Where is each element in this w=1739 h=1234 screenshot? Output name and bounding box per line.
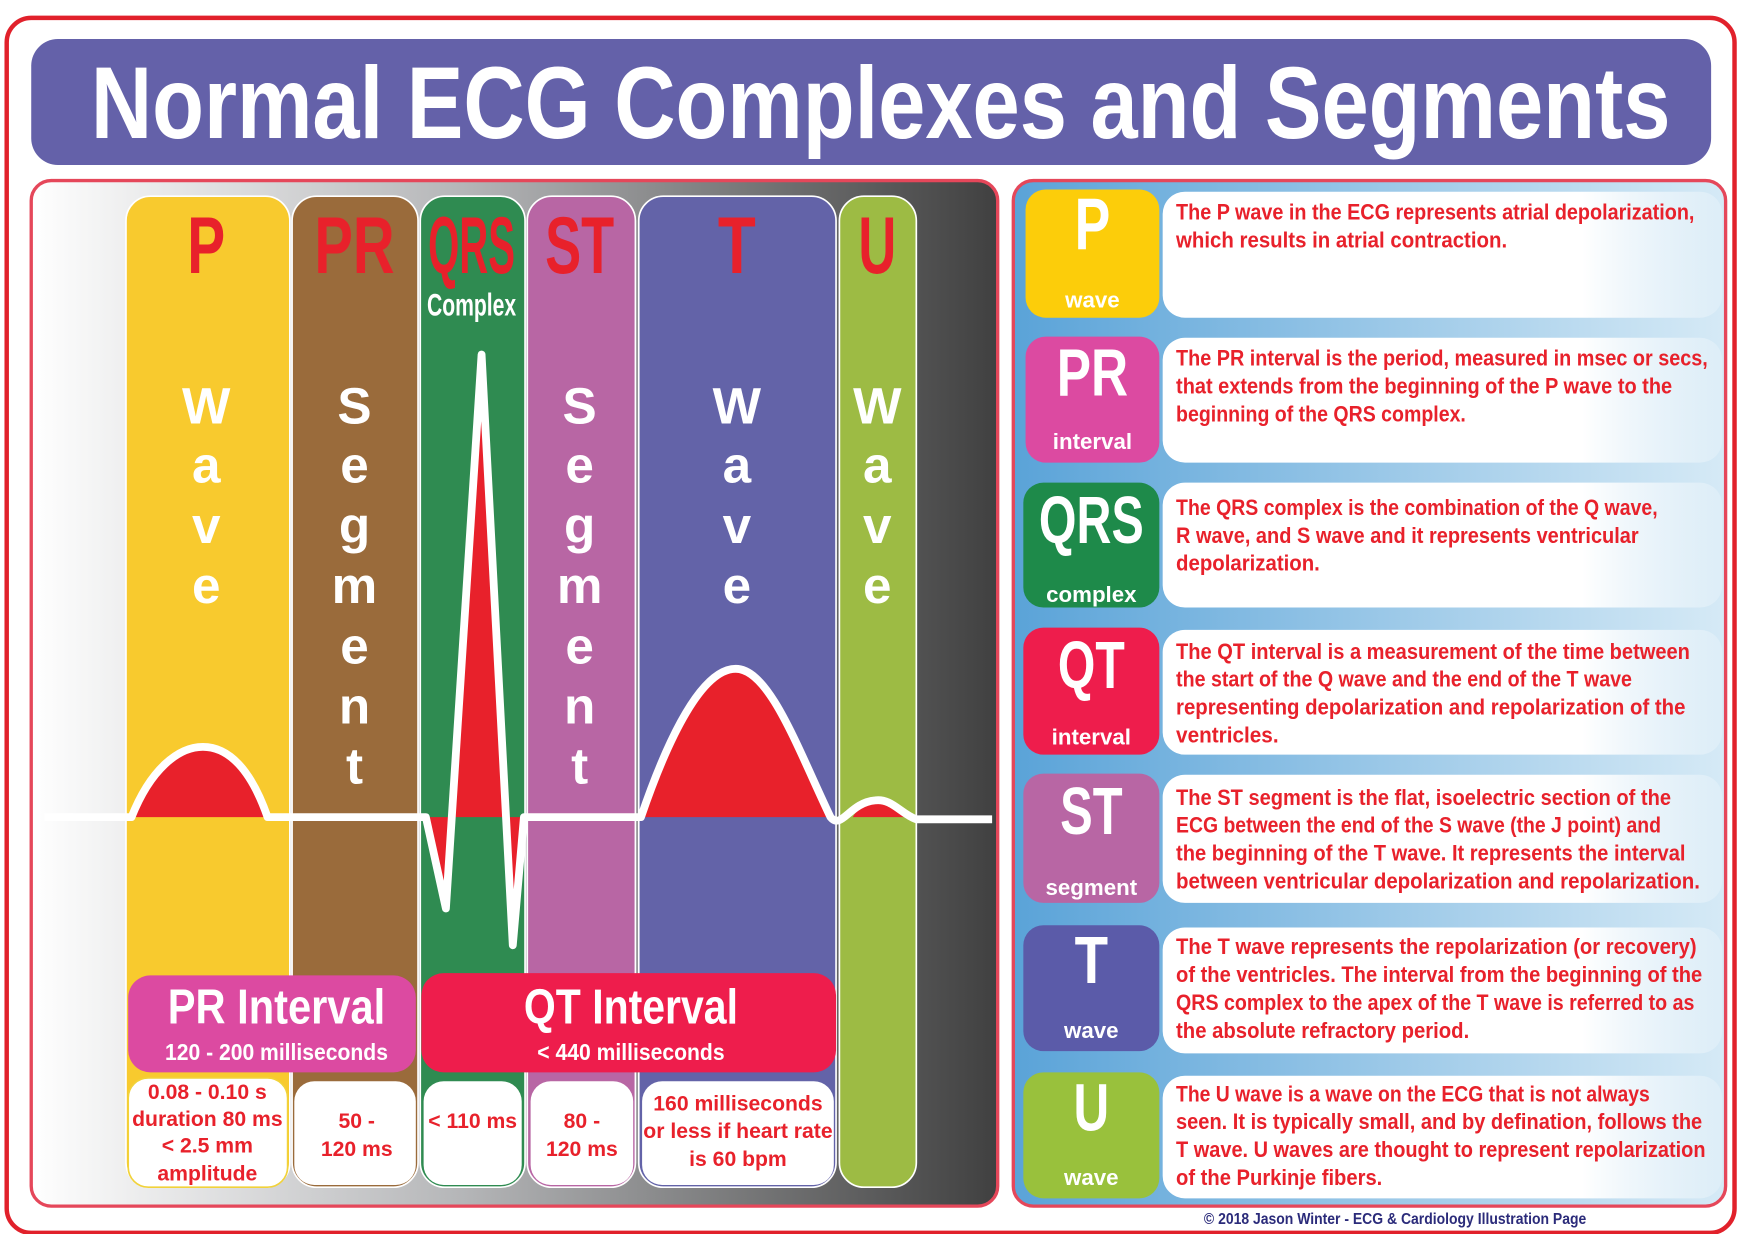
row: ST: ST — [1060, 774, 1123, 849]
column: T wave: W — [713, 378, 762, 435]
row: QT: the start of the Q wave and the end of the T wave — [1176, 667, 1632, 692]
row: U: The U wave is a wave on the ECG that is not always — [1176, 1081, 1650, 1106]
PR interval box: 120 - 200 milliseconds — [165, 1039, 388, 1065]
row: QT: QT — [1058, 628, 1125, 703]
column: PR segment: PR — [314, 201, 395, 291]
column: P wave: P — [187, 201, 225, 291]
row: ST: ECG between the end of the S wave (the J point) and — [1176, 813, 1661, 838]
row: QT: representing depolarization and repolarization of the — [1176, 695, 1685, 720]
row: PR: PR — [1057, 336, 1128, 411]
row: T — [1023, 923, 1722, 1053]
row: QRS: depolarization. — [1176, 551, 1320, 576]
row: U: wave — [1063, 1165, 1119, 1190]
column: ST segment: n — [564, 677, 595, 734]
row: U: of the Purkinje fibers. — [1176, 1165, 1382, 1190]
column: QRS complex: Complex — [427, 287, 517, 322]
copyright: © 2018 Jason Winter - ECG & Cardiology Illustration Page — [1204, 1211, 1587, 1228]
row: T: QRS complex to the apex of the T wave is referred to as — [1176, 990, 1694, 1015]
panel: descriptions — [1013, 181, 1726, 1206]
row: QT: interval — [1052, 725, 1131, 750]
row: ST — [1023, 774, 1722, 903]
column: PR segment: n — [339, 677, 370, 734]
column: T wave: T — [718, 201, 756, 291]
box: QRS duration — [424, 1081, 522, 1185]
column: T wave: a — [723, 437, 752, 494]
box: P duration: amplitude — [157, 1162, 258, 1185]
row: PR: that extends from the beginning of the P wave to the — [1176, 373, 1672, 398]
QT interval box — [421, 973, 836, 1072]
column: U wave: e — [863, 557, 892, 614]
row: QT — [1023, 628, 1722, 755]
panel: ECG diagram — [31, 181, 998, 1206]
row: ST: segment — [1046, 875, 1138, 900]
box: P duration: < 2.5 mm — [162, 1135, 253, 1158]
row: U: T wave. U waves are thought to represent repolarization — [1176, 1137, 1706, 1162]
box: ST duration — [531, 1081, 633, 1185]
row: ST: the beginning of the T wave. It represents the interval — [1176, 841, 1685, 866]
row: QRS — [1023, 483, 1722, 608]
column: ST segment: e — [565, 617, 594, 674]
row: U: U — [1073, 1070, 1109, 1145]
box: ST duration: 120 ms — [546, 1138, 618, 1161]
column: ST segment: S — [563, 378, 597, 435]
column: ST segment: g — [564, 497, 595, 554]
column: U wave: v — [863, 497, 892, 554]
box: T duration: 160 milliseconds — [653, 1092, 823, 1115]
row: QT: ventricles. — [1176, 722, 1279, 747]
QT interval box: < 440 milliseconds — [537, 1039, 725, 1065]
column: ST segment: m — [557, 557, 602, 614]
row: T: of the ventricles. The interval from the beginning of the — [1176, 962, 1702, 987]
column: U wave: a — [863, 437, 892, 494]
column: PR segment: S — [337, 378, 372, 435]
box: T duration: is 60 bpm — [689, 1148, 787, 1171]
box: P duration: duration 80 ms — [132, 1108, 283, 1131]
column: P wave — [126, 196, 290, 1187]
column: U wave — [839, 196, 916, 1187]
row: T: the absolute refractory period. — [1176, 1018, 1469, 1043]
row: T: wave — [1063, 1018, 1119, 1043]
row: PR — [1026, 336, 1722, 463]
row: P — [1026, 183, 1722, 318]
column: ST segment: t — [571, 738, 588, 795]
box: T duration — [642, 1081, 834, 1185]
column: ST segment — [527, 196, 635, 1187]
column: P wave: W — [182, 378, 231, 435]
column: QRS complex: QRS — [428, 201, 515, 291]
column: P wave: a — [192, 437, 221, 494]
column: ST segment: ST — [545, 201, 614, 291]
row: QRS: QRS — [1039, 483, 1144, 558]
column: P wave: v — [192, 497, 221, 554]
column: U wave: W — [853, 378, 902, 435]
row: ST: between ventricular depolarization and repolarization. — [1176, 868, 1700, 893]
row: P: which results in atrial contraction. — [1175, 227, 1507, 252]
row: PR: interval — [1053, 429, 1132, 454]
box: P duration: 0.08 - 0.10 s — [148, 1081, 267, 1104]
column: PR segment: t — [346, 738, 363, 795]
row: QRS: The QRS complex is the combination of the Q wave, — [1176, 495, 1658, 520]
box: PR duration: 120 ms — [321, 1138, 393, 1161]
column: U wave: U — [858, 201, 896, 291]
column: QRS complex — [420, 196, 525, 1187]
row: QRS: R wave, and S wave and it represents ventricular — [1176, 523, 1639, 548]
column: T wave: e — [723, 557, 751, 614]
row: ST: The ST segment is the flat, isoelectric section of the — [1176, 785, 1671, 810]
column: P wave: e — [192, 557, 220, 614]
column: ST segment: e — [565, 437, 594, 494]
box: P duration — [128, 1078, 288, 1187]
duration boxes — [128, 1078, 834, 1187]
column: PR segment: g — [339, 497, 370, 554]
box: ST duration: 80 - — [564, 1110, 600, 1133]
row: P: The P wave in the ECG represents atrial depolarization, — [1176, 200, 1694, 225]
row: QT: The QT interval is a measurement of the time between — [1176, 639, 1690, 664]
row: P: wave — [1064, 288, 1120, 313]
row: T: The T wave represents the repolarization (or recovery) — [1176, 934, 1697, 959]
row: U — [1023, 1070, 1722, 1198]
row: QRS: complex — [1046, 582, 1137, 607]
box: PR duration — [294, 1081, 416, 1185]
box: T duration: or less if heart rate — [643, 1120, 833, 1143]
column: PR segment: e — [340, 617, 369, 674]
box: PR duration: 50 - — [338, 1110, 375, 1133]
row: T: T — [1075, 923, 1108, 998]
box: QRS duration: < 110 ms — [428, 1110, 517, 1133]
row: U: seen. It is typically small, and by defination, follows the — [1176, 1109, 1702, 1134]
row: P: P — [1075, 183, 1110, 266]
column: PR segment: m — [332, 557, 377, 614]
column: T wave: v — [723, 497, 752, 554]
column: PR segment — [292, 196, 418, 1187]
row: PR: beginning of the QRS complex. — [1176, 401, 1466, 426]
ECG trace — [45, 354, 992, 945]
QT interval box: QT Interval — [524, 980, 738, 1034]
PR interval box: PR Interval — [168, 980, 385, 1034]
PR interval box — [128, 975, 416, 1072]
column: PR segment: e — [340, 437, 369, 494]
column: T wave — [639, 196, 836, 1187]
